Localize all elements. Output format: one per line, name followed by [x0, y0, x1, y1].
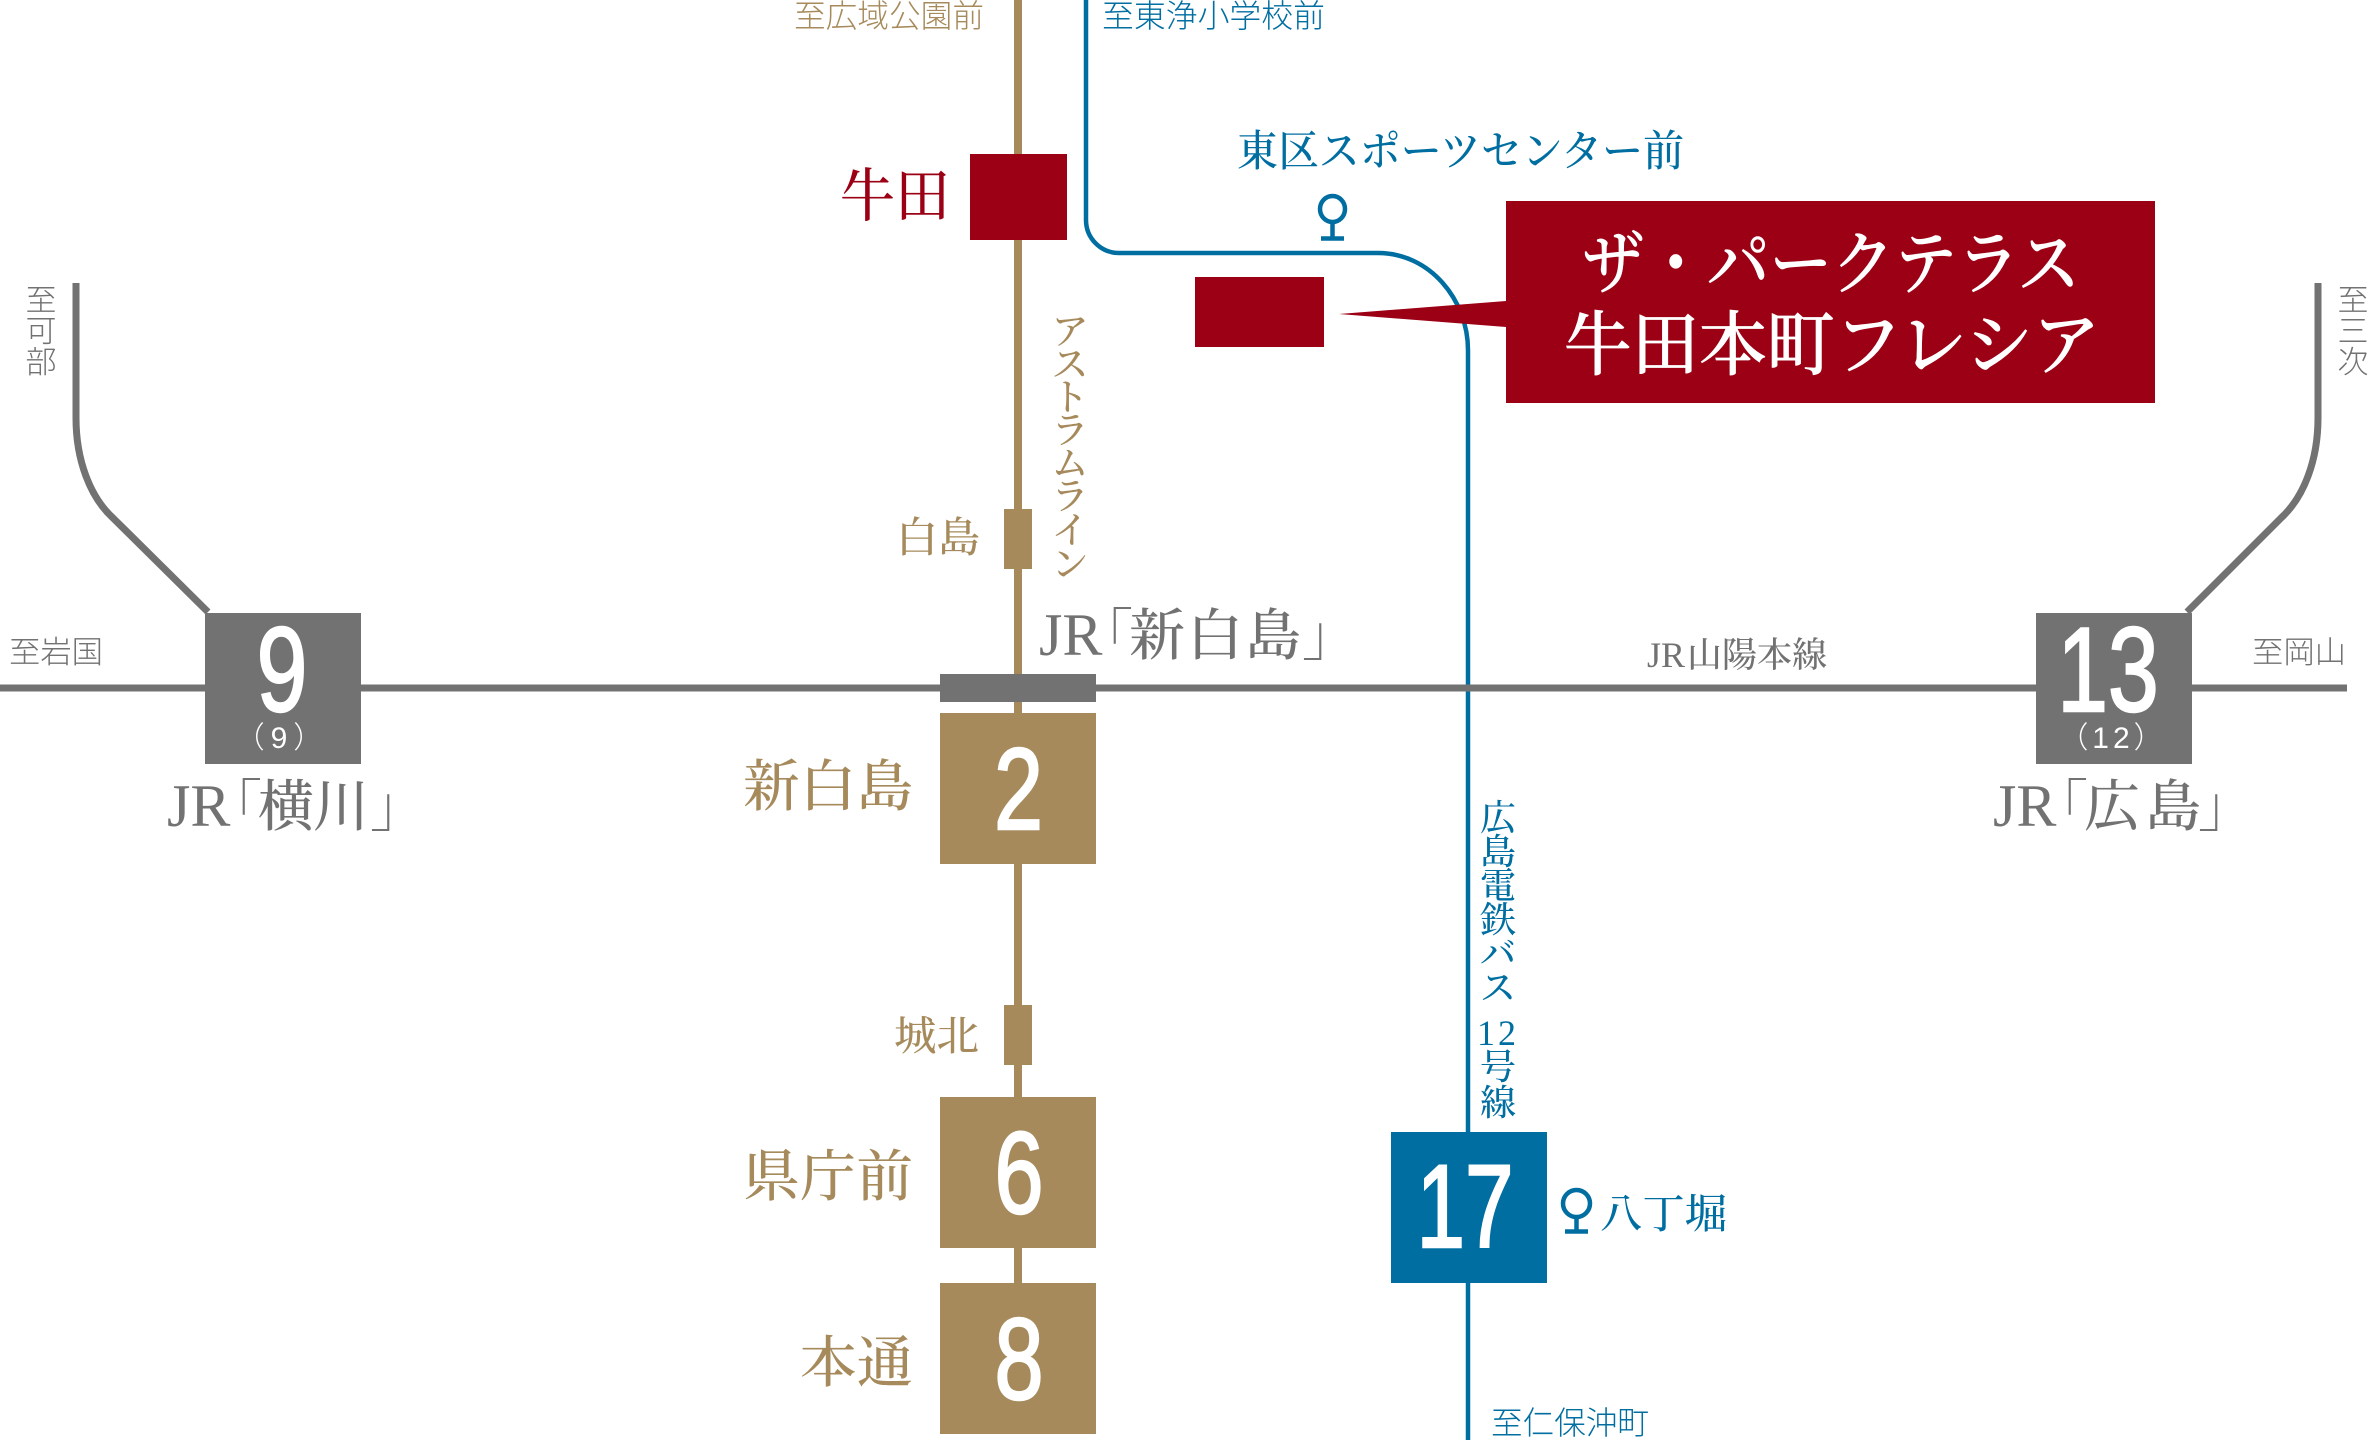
label: Hiroden Bus route 12 (vertical): 線 [1480, 1083, 1516, 1123]
label: to Niho Okimachi: 至仁保沖町 [1491, 1405, 1649, 1440]
station: Hondori 8: 本通 [800, 1333, 913, 1395]
station: JR Yokogawa 9: （9） [235, 722, 329, 755]
station: Ushita: 牛田 [840, 164, 950, 229]
station: Shin-Hakushima 2: 2 [994, 724, 1043, 854]
bus line track [1086, 0, 1468, 1440]
station: JR Yokogawa 9: JR [167, 773, 230, 839]
station: Johoku: 城北 [894, 1013, 979, 1059]
label: Hatchobori: 八丁堀 [1600, 1191, 1727, 1237]
Astram line track [1014, 0, 1022, 1434]
station: JR Hiroshima 13: 広 [2084, 777, 2141, 839]
JR Sanyo main line track [0, 684, 2347, 692]
label: Hiroden Bus route 12 (vertical): 12 [1477, 1013, 1519, 1053]
station: Hondori 8 [800, 1283, 1096, 1434]
callout: The Park Terrace Ushita Honmachi Flexia: ザ・パークテラス [1582, 227, 2080, 304]
label: JR Sanyo main line: 山 [1687, 636, 1722, 675]
station: JR Yokogawa 9: 川 [313, 777, 369, 839]
station: JR Yokogawa 9 [167, 603, 426, 839]
label: to Iwakuni: 至岩国 [9, 635, 103, 670]
property marker [1195, 277, 1324, 347]
label: Hiroden Bus route 12 (vertical): 広 [1480, 798, 1517, 838]
label: to Kabe (vertical): 至可部 [26, 283, 56, 380]
station: Hakushima [896, 509, 1032, 569]
station: JR Shin-Hakushima: 「 [1077, 606, 1133, 668]
callout: The Park Terrace Ushita Honmachi Flexia [1339, 201, 2155, 403]
station: JR Hiroshima 13: （12） [2058, 722, 2168, 755]
label: Astram Line (vertical): アストラムライン [1052, 312, 1088, 586]
station: JR Shin-Hakushima: JR [1039, 602, 1102, 668]
station: Kencho-mae 6: 県庁前 [743, 1147, 913, 1209]
label: Hiroden Bus route 12 (vertical): 号 [1480, 1047, 1516, 1087]
station: Johoku [894, 1005, 1032, 1065]
callout: The Park Terrace Ushita Honmachi Flexia: 牛田本町フレシア [1564, 308, 2100, 385]
station: Shin-Hakushima 2 [743, 713, 1096, 864]
label: to Miyoshi (vertical): 至三次 [2338, 283, 2368, 380]
label: Hiroden Bus route 12 (vertical): ス [1480, 968, 1516, 1008]
label: JR Sanyo main line: 陽 [1722, 636, 1757, 675]
station: JR Yokogawa 9: 横 [258, 777, 314, 839]
station: Hatchobori bus 17: 17 [1416, 1140, 1514, 1272]
label: JR Sanyo main line: 線 [1792, 636, 1827, 675]
station: Ushita [840, 154, 1067, 240]
station: JR Shin-Hakushima: 白 [1187, 606, 1243, 668]
label: Hiroden Bus route 12 (vertical): 電 [1480, 866, 1516, 906]
station: JR Yokogawa 9: 「 [206, 777, 262, 839]
station: JR Yokogawa 9: 」 [370, 777, 426, 839]
station: Kencho-mae 6 [743, 1097, 1096, 1248]
label: to Okayama: 至岡山 [2252, 635, 2346, 670]
label: JR Sanyo main line: JR [1647, 635, 1685, 675]
JR Miyoshi branch line [2187, 283, 2318, 612]
station: JR Shin-Hakushima [940, 602, 1358, 702]
station: JR Hiroshima 13: JR [1993, 773, 2056, 839]
station: Shin-Hakushima 2: 新白島 [743, 757, 913, 819]
station: JR Hiroshima 13: 」 [2198, 777, 2254, 839]
station: JR Hiroshima 13: 島 [2145, 777, 2201, 839]
label: Hiroden Bus route 12 (vertical): バ [1480, 934, 1516, 974]
label: Higashi-ku Sports Center-mae: 東区スポーツセンター前 [1237, 128, 1684, 176]
station: JR Yokogawa 9: 9 [257, 603, 307, 737]
label: JR Sanyo main line: 本 [1757, 636, 1792, 675]
station: JR Shin-Hakushima: 」 [1302, 606, 1358, 668]
station: JR Shin-Hakushima: 新 [1129, 606, 1185, 668]
station: Hondori 8: 8 [994, 1294, 1044, 1424]
icon: bus stop [1320, 196, 1345, 238]
label: Hiroden Bus route 12 (vertical): 島 [1480, 832, 1516, 872]
station: JR Shin-Hakushima: 島 [1245, 606, 1301, 668]
station: JR Hiroshima 13: 13 [2057, 603, 2159, 737]
station: Hatchobori bus 17 [1391, 1132, 1547, 1283]
JR Kabe branch line [76, 283, 208, 612]
station: Hakushima: 白島 [896, 516, 980, 562]
icon: bus stop Hatchobori [1563, 1190, 1590, 1232]
label: Hiroden Bus route 12 (vertical): 鉄 [1480, 900, 1516, 940]
station: JR Hiroshima 13: 「 [2032, 777, 2088, 839]
station: JR Hiroshima 13 [1993, 603, 2254, 839]
station: Kencho-mae 6: 6 [994, 1108, 1044, 1238]
